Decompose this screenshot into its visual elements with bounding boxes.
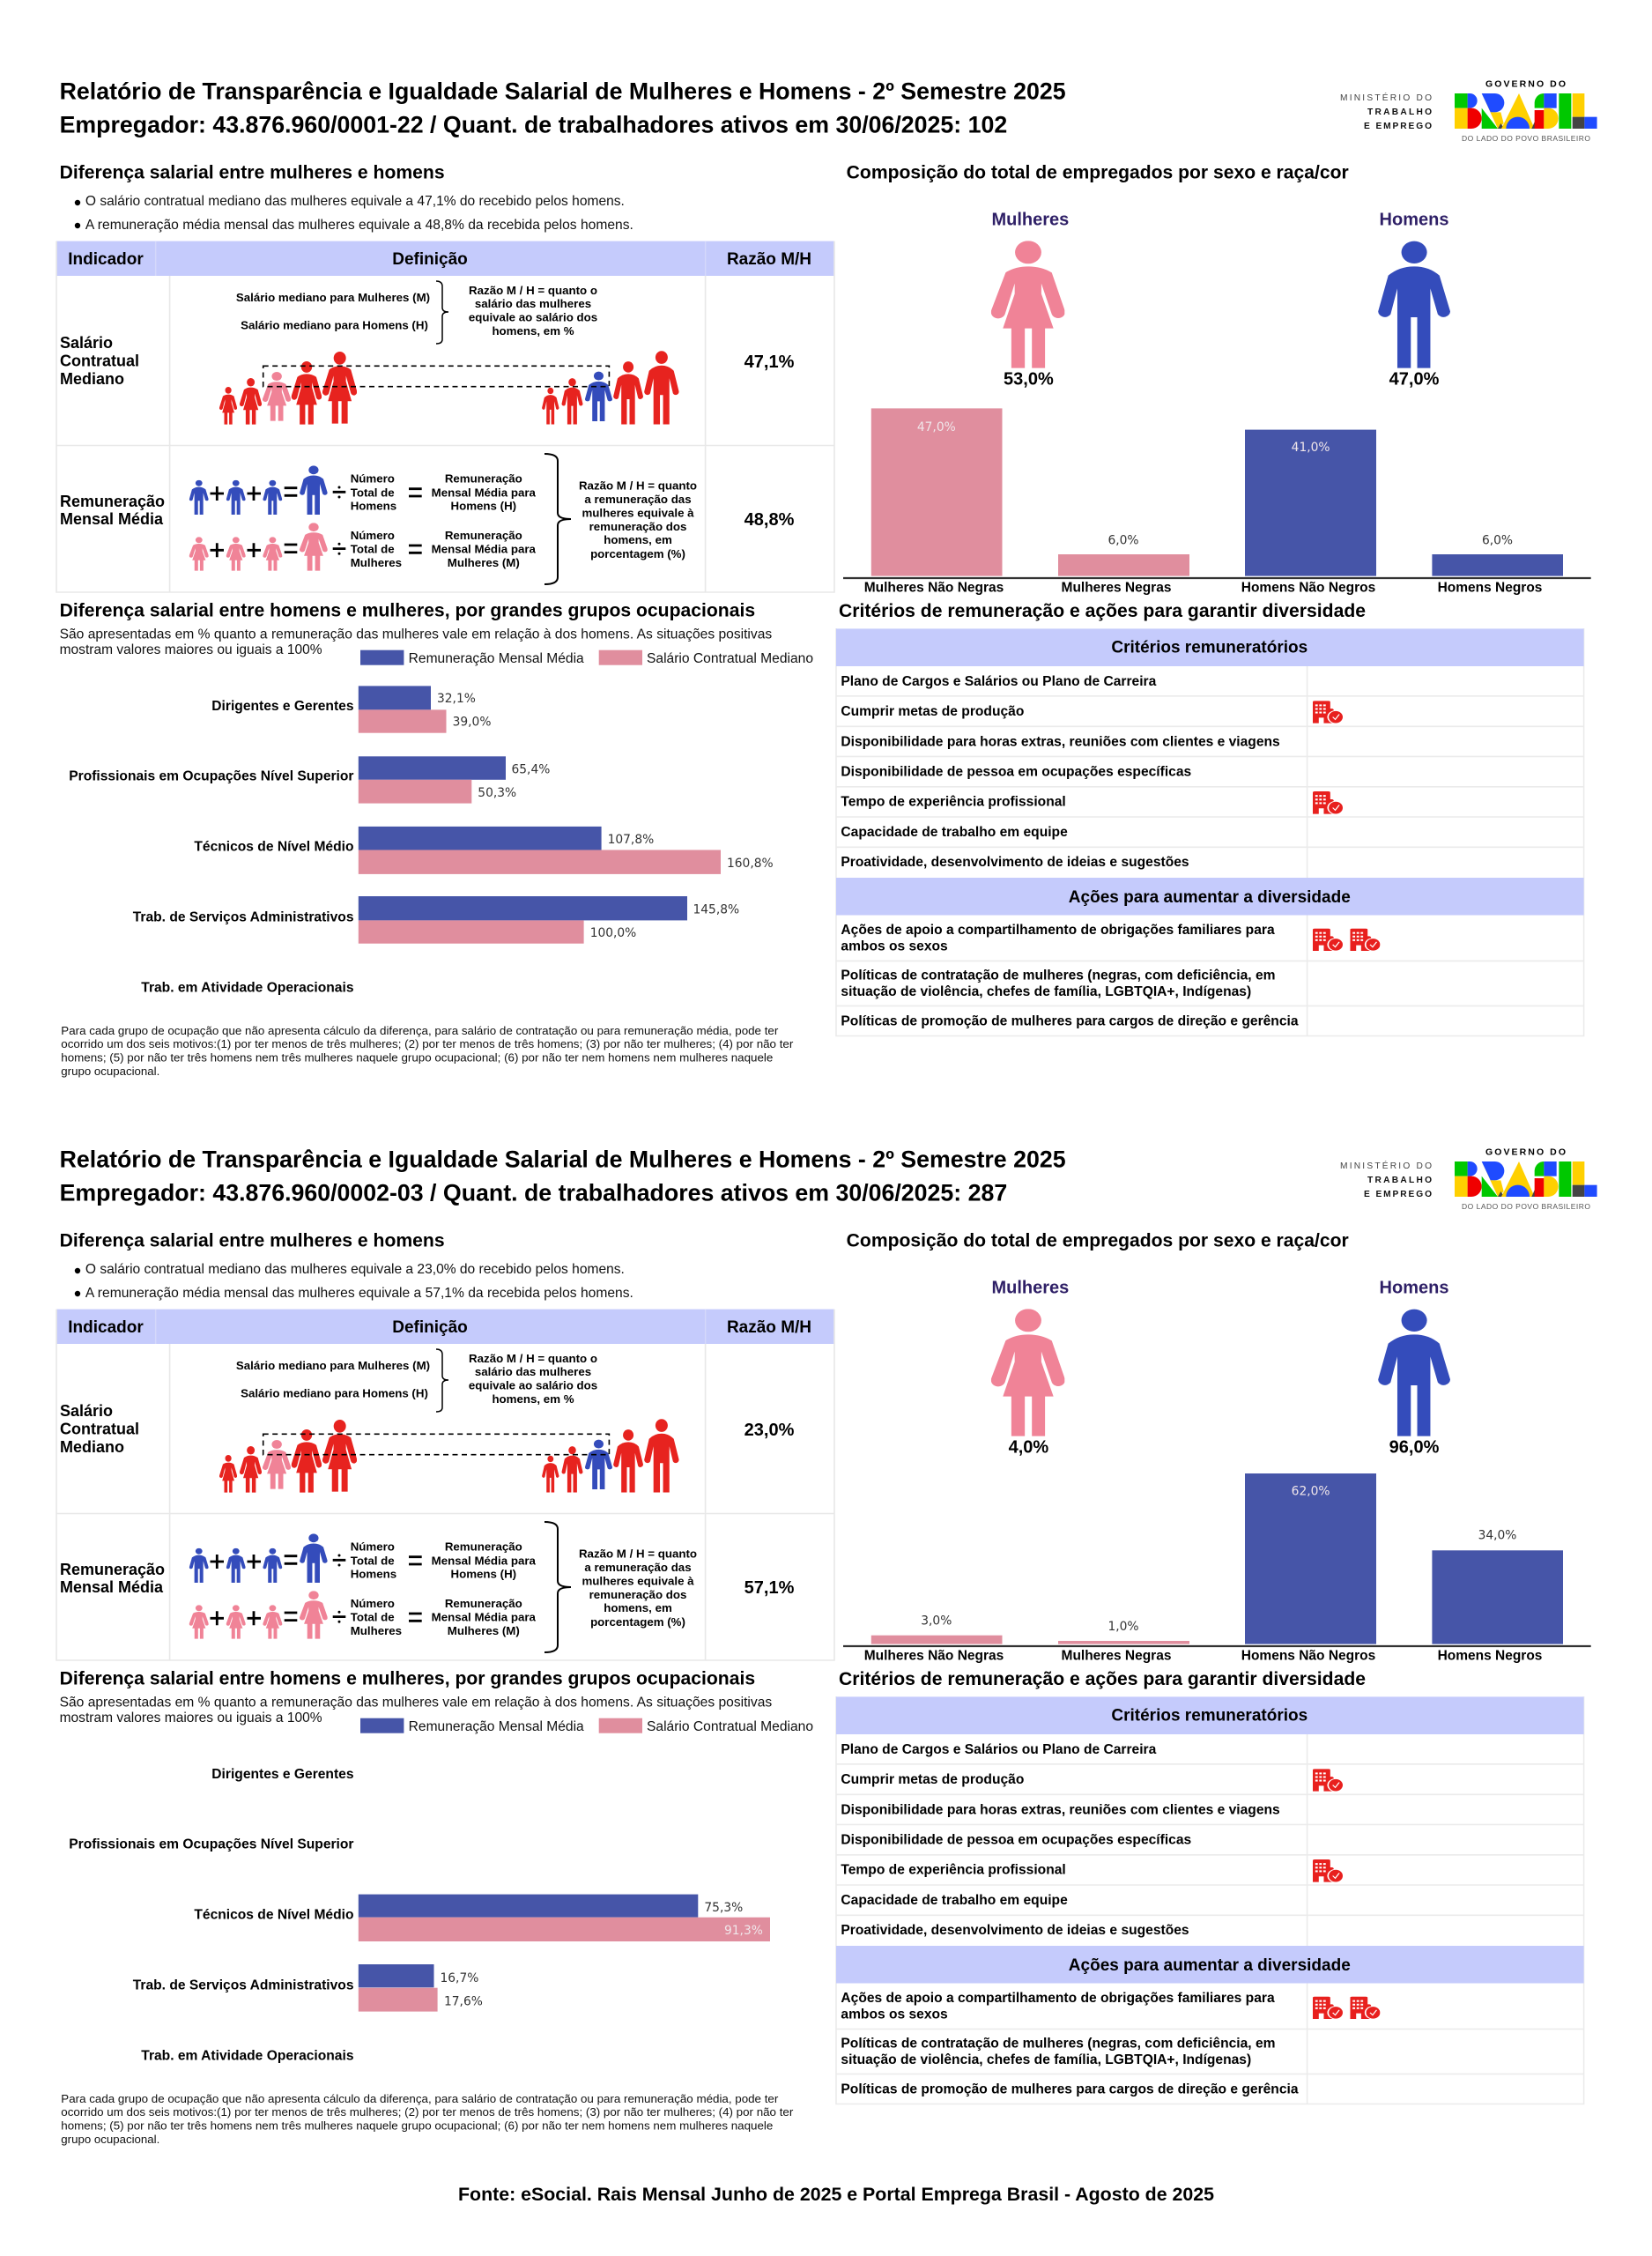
title: Relatório de Transparência e Igualdade Salarial de Mulheres e Homens - 2º Semestre 2025 <box>60 78 1066 104</box>
bar chart: grupos ocupacionais <box>69 686 774 995</box>
description text: São apresentadas em % quanto a remuneração das mulheres vale em relação à dos homens. As situações positivas <box>60 627 772 642</box>
bullet text block: A remuneração média mensal das mulheres equivale a 57,1% da recebida pelos homens. <box>85 1286 633 1301</box>
bar chart: grupos ocupacionais: 50,3% <box>478 786 516 800</box>
legend: Salário Contratual Mediano <box>647 1719 813 1734</box>
row: remuneração mensal média: Mensal Média <box>60 1578 164 1596</box>
bullet text block: A remuneração média mensal das mulheres equivale a 48,8% da recebida pelos homens. <box>85 218 633 233</box>
bar chart: composição por raça/cor <box>843 1473 1591 1664</box>
bar chart: grupos ocupacionais: 16,7% <box>441 1971 478 1985</box>
row: remuneração mensal média: Número <box>351 472 395 486</box>
row: remuneração mensal média: Mensal Média para <box>432 486 537 499</box>
report 1: employer 0001-22 <box>56 78 1597 1078</box>
header: ações: Ações para aumentar a diversidade <box>1069 1956 1351 1975</box>
row: remuneração mensal média: remuneração dos <box>589 520 686 533</box>
panel: homens figure: 47,0% <box>1389 370 1440 390</box>
row: salário contratual mediano: homens, em % <box>492 1392 574 1406</box>
bar chart: composição por raça/cor: Homens Não Negros <box>1241 580 1375 596</box>
row: remuneração mensal média: Mensal Média <box>60 510 164 528</box>
panel: mulheres figure: Mulheres <box>991 1279 1069 1298</box>
bar chart: grupos ocupacionais: Dirigentes e Gerentes <box>211 1767 354 1782</box>
logo: ministério e governo do Brasil: DO LADO DO POVO BRASILEIRO <box>1462 1202 1590 1211</box>
row: salário contratual mediano: Contratual <box>60 352 139 370</box>
header: critérios remuneratórios <box>836 1696 1584 1734</box>
row: salário contratual mediano: Salário mediano para Mulheres (M) <box>236 1359 430 1372</box>
footnote: homens; (5) por não ter três homens nem três mulheres naquele grupo ocupacional; (6) por não ter nem homens nem mulheres naquele <box>61 2119 773 2133</box>
criteria rows: Cumprir metas de produção <box>841 1772 1024 1787</box>
logo: ministério e governo do Brasil: TRABALHO <box>1367 1176 1432 1185</box>
bar chart: composição por raça/cor: 6,0% <box>1482 534 1513 548</box>
action rows: Políticas de promoção de mulheres para cargos de direção e gerência <box>841 1013 1299 1029</box>
logo: ministério e governo do Brasil: E EMPREGO <box>1364 122 1432 131</box>
bar chart: composição por raça/cor <box>843 408 1591 596</box>
bar chart: composição por raça/cor: Mulheres Negras <box>1062 1648 1171 1664</box>
footnote: homens; (5) por não ter três homens nem três mulheres naquele grupo ocupacional; (6) por não ter nem homens nem mulheres naquele <box>61 1051 773 1065</box>
row: salário contratual mediano <box>60 1349 795 1493</box>
source line: Fonte: eSocial. Rais Mensal Junho de 2025 e Portal Emprega Brasil - Agosto de 2025 <box>458 2184 1214 2205</box>
action rows: situação de violência, chefes de família, LGBTQIA+, Indígenas) <box>841 2052 1251 2067</box>
row: remuneração mensal média: Remuneração <box>60 493 165 510</box>
panel: homens figure: 96,0% <box>1389 1438 1440 1458</box>
description text: mostram valores maiores ou iguais a 100% <box>60 642 322 657</box>
row: remuneração mensal média: Remuneração <box>445 472 522 486</box>
legend: Salário Contratual Mediano <box>647 651 813 666</box>
table header <box>56 1310 834 1344</box>
criteria rows: Capacidade de trabalho em equipe <box>841 1893 1068 1908</box>
row: remuneração mensal média: Número <box>351 1597 395 1610</box>
footnote: Para cada grupo de ocupação que não apresenta cálculo da diferença, para salário de contratação ou para remuneração média, pode ter <box>61 1024 779 1037</box>
heading: critérios: Critérios de remuneração e ações para garantir diversidade <box>839 1669 1366 1689</box>
panel: mulheres figure: 53,0% <box>1004 370 1054 390</box>
heading: diferença salarial: Diferença salarial entre mulheres e homens <box>60 1230 445 1251</box>
bullet text block: O salário contratual mediano das mulheres equivale a 23,0% do recebido pelos homens. <box>85 1262 625 1277</box>
row: remuneração mensal média: Mensal Média para <box>432 1554 537 1567</box>
row: remuneração mensal média: mulheres equivale à <box>582 506 694 519</box>
panel: mulheres figure: 4,0% <box>1009 1438 1048 1458</box>
bar chart: composição por raça/cor: Homens Não Negros <box>1241 1648 1375 1664</box>
title <box>60 1146 1066 1206</box>
row: remuneração mensal média: Homens <box>351 500 396 513</box>
panel: homens figure <box>1378 1279 1450 1458</box>
criteria rows: Disponibilidade de pessoa em ocupações específicas <box>841 764 1192 779</box>
row: remuneração mensal média <box>60 454 795 584</box>
row: remuneração mensal média: Mensal Média para <box>432 1610 537 1623</box>
row: salário contratual mediano: 47,1% <box>745 352 795 372</box>
criteria rows <box>841 1742 1344 1938</box>
bar chart: composição por raça/cor: 41,0% <box>1292 441 1330 455</box>
row: salário contratual mediano: salário das mulheres <box>475 297 591 310</box>
panel: mulheres figure <box>991 1279 1069 1458</box>
row: salário contratual mediano: Salário <box>60 1402 113 1420</box>
panel: critérios table <box>836 1696 1584 2104</box>
footnote <box>61 1024 794 1078</box>
logo: ministério e governo do Brasil <box>1340 1147 1597 1211</box>
row: remuneração mensal média: porcentagem (%) <box>590 1615 685 1629</box>
bar chart: composição por raça/cor: Mulheres Negras <box>1062 580 1171 596</box>
panel: homens figure: Homens <box>1380 211 1448 230</box>
bar chart: grupos ocupacionais: 65,4% <box>511 763 550 777</box>
action rows: situação de violência, chefes de família, LGBTQIA+, Indígenas) <box>841 984 1251 999</box>
logo: ministério e governo do Brasil: E EMPREGO <box>1364 1190 1432 1199</box>
action rows: Políticas de contratação de mulheres (negras, com deficiência, em <box>841 968 1276 983</box>
title: Relatório de Transparência e Igualdade Salarial de Mulheres e Homens - 2º Semestre 2025 <box>60 1146 1066 1172</box>
heading: grupos ocupacionais: Diferença salarial entre homens e mulheres, por grandes grupos ocupacionais <box>60 601 755 621</box>
bar chart: grupos ocupacionais: Técnicos de Nível Médio <box>194 1908 354 1923</box>
row: salário contratual mediano: equivale ao salário dos <box>469 1379 597 1392</box>
row: remuneração mensal média: Homens (H) <box>450 1568 516 1581</box>
row: salário contratual mediano: Salário mediano para Homens (H) <box>241 1386 428 1399</box>
criteria rows: Cumprir metas de produção <box>841 704 1024 719</box>
header: critérios remuneratórios <box>836 628 1584 666</box>
row: remuneração mensal média: 48,8% <box>745 510 795 530</box>
logo: ministério e governo do Brasil: GOVERNO DO <box>1485 1147 1566 1157</box>
header: ações <box>836 1946 1584 1983</box>
criteria rows: Plano de Cargos e Salários ou Plano de Carreira <box>841 1742 1157 1757</box>
bar chart: grupos ocupacionais: 107,8% <box>608 833 654 847</box>
bar chart: grupos ocupacionais: 75,3% <box>704 1901 743 1915</box>
row: remuneração mensal média: Número <box>351 529 395 542</box>
bar chart: grupos ocupacionais: 100,0% <box>590 926 636 940</box>
row: remuneração mensal média: Mulheres <box>351 1624 402 1637</box>
report 2: employer 0002-03 <box>56 1146 1597 2146</box>
row: remuneração mensal média: remuneração dos <box>589 1588 686 1601</box>
panel: homens figure <box>1378 211 1450 390</box>
panel: critérios table <box>836 628 1584 1036</box>
action rows: Políticas de promoção de mulheres para cargos de direção e gerência <box>841 2082 1299 2097</box>
table header: Razão M/H <box>727 1318 811 1337</box>
bar chart: composição por raça/cor: Homens Negros <box>1438 580 1542 596</box>
action rows: Políticas de contratação de mulheres (negras, com deficiência, em <box>841 2036 1276 2052</box>
legend <box>360 1718 813 1734</box>
bar chart: grupos ocupacionais: Trab. em Atividade Operacionais <box>141 980 354 995</box>
row: salário contratual mediano: Salário mediano para Homens (H) <box>241 318 428 331</box>
panel: indicator table <box>56 241 834 592</box>
row: salário contratual mediano: salário das mulheres <box>475 1365 591 1378</box>
header: ações: Ações para aumentar a diversidade <box>1069 888 1351 907</box>
heading: critérios: Critérios de remuneração e ações para garantir diversidade <box>839 601 1366 621</box>
bar chart: grupos ocupacionais: Técnicos de Nível Médio <box>194 840 354 855</box>
bar chart: composição por raça/cor: Homens Negros <box>1438 1648 1542 1664</box>
bar chart: grupos ocupacionais: 17,6% <box>444 1995 483 2009</box>
footnote <box>61 2092 794 2146</box>
title: Empregador: 43.876.960/0001-22 / Quant. de trabalhadores ativos em 30/06/2025: 102 <box>60 111 1007 137</box>
bar chart: composição por raça/cor: Mulheres Não Negras <box>864 580 1004 596</box>
row: salário contratual mediano: homens, em % <box>492 324 574 338</box>
description text <box>60 627 772 657</box>
row: salário contratual mediano: Razão M / H = quanto o <box>469 284 597 297</box>
legend: Remuneração Mensal Média <box>409 1719 584 1734</box>
bar chart: grupos ocupacionais: 39,0% <box>453 716 491 730</box>
criteria rows: Capacidade de trabalho em equipe <box>841 825 1068 840</box>
criteria rows: Disponibilidade para horas extras, reuniões com clientes e viagens <box>841 1802 1280 1817</box>
table header: Definição <box>392 250 468 269</box>
row: remuneração mensal média: Mensal Média para <box>432 542 537 555</box>
row: remuneração mensal média: a remuneração das <box>584 1561 692 1574</box>
criteria rows: Tempo de experiência profissional <box>841 795 1066 809</box>
bar chart: grupos ocupacionais: Trab. de Serviços Administrativos <box>133 909 354 925</box>
logo: ministério e governo do Brasil: MINISTÉRIO DO <box>1340 92 1432 103</box>
criteria rows: Tempo de experiência profissional <box>841 1863 1066 1877</box>
row: remuneração mensal média: Total de <box>351 486 395 499</box>
bullet text block: O salário contratual mediano das mulheres equivale a 47,1% do recebido pelos homens. <box>85 194 625 209</box>
table header: Indicador <box>68 1318 144 1337</box>
row: remuneração mensal média: Homens (H) <box>450 500 516 513</box>
bar chart: composição por raça/cor: 1,0% <box>1108 1620 1139 1634</box>
row: remuneração mensal média: a remuneração das <box>584 493 692 506</box>
logo: ministério e governo do Brasil: MINISTÉRIO DO <box>1340 1160 1432 1171</box>
criteria rows <box>841 674 1344 870</box>
bar chart: grupos ocupacionais: Profissionais em Ocupações Nível Superior <box>69 1837 354 1852</box>
legend: Remuneração Mensal Média <box>409 651 584 666</box>
bar chart: grupos ocupacionais: Trab. de Serviços Administrativos <box>133 1978 354 1993</box>
bar chart: composição por raça/cor: Mulheres Não Negras <box>864 1648 1004 1664</box>
row: salário contratual mediano: Salário <box>60 334 113 352</box>
description text: mostram valores maiores ou iguais a 100% <box>60 1711 322 1725</box>
bar chart: grupos ocupacionais: Dirigentes e Gerentes <box>211 699 354 714</box>
bar chart: grupos ocupacionais: Profissionais em Ocupações Nível Superior <box>69 769 354 784</box>
bar chart: composição por raça/cor: 6,0% <box>1108 534 1139 548</box>
row: remuneração mensal média: Total de <box>351 542 395 555</box>
row: remuneração mensal média: Remuneração <box>60 1561 165 1578</box>
logo: ministério e governo do Brasil: DO LADO DO POVO BRASILEIRO <box>1462 134 1590 143</box>
row: remuneração mensal média: Remuneração <box>445 1540 522 1554</box>
logo: ministério e governo do Brasil: TRABALHO <box>1367 108 1432 117</box>
bar chart: grupos ocupacionais: 145,8% <box>693 902 739 916</box>
row: remuneração mensal média: porcentagem (%) <box>590 547 685 560</box>
table header: Razão M/H <box>727 250 811 269</box>
footnote: grupo ocupacional. <box>61 2133 159 2146</box>
row: salário contratual mediano: Mediano <box>60 370 124 388</box>
action rows <box>841 1991 1381 2097</box>
row: salário contratual mediano: Contratual <box>60 1421 139 1438</box>
row: remuneração mensal média: Número <box>351 1540 395 1554</box>
bar chart: composição por raça/cor: 62,0% <box>1292 1485 1330 1499</box>
table header: Indicador <box>68 250 144 269</box>
row: remuneração mensal média: 57,1% <box>745 1578 795 1598</box>
bar chart: grupos ocupacionais: 32,1% <box>437 692 476 706</box>
row: salário contratual mediano: Salário mediano para Mulheres (M) <box>236 291 430 304</box>
table header: Definição <box>392 1318 468 1337</box>
bullet text block <box>75 1262 633 1301</box>
action rows: Ações de apoio a compartilhamento de obrigações familiares para <box>841 1991 1275 2006</box>
row: remuneração mensal média: Mulheres <box>351 556 402 569</box>
bar chart: grupos ocupacionais: Trab. em Atividade Operacionais <box>141 2048 354 2063</box>
row: remuneração mensal média: Total de <box>351 1554 395 1567</box>
row: salário contratual mediano: Mediano <box>60 1438 124 1456</box>
row: remuneração mensal média <box>60 1522 795 1652</box>
row: remuneração mensal média: Remuneração <box>445 1597 522 1610</box>
criteria rows: Disponibilidade para horas extras, reuniões com clientes e viagens <box>841 734 1280 749</box>
row: remuneração mensal média: homens, em <box>604 1601 672 1614</box>
row: remuneração mensal média: homens, em <box>604 533 672 546</box>
header: ações <box>836 878 1584 915</box>
heading: composição: Composição do total de empregados por sexo e raça/cor <box>847 162 1349 183</box>
logo: ministério e governo do Brasil: GOVERNO DO <box>1485 78 1566 89</box>
table header <box>56 241 834 276</box>
row: remuneração mensal média: Mulheres (M) <box>448 556 520 569</box>
bar chart: grupos ocupacionais <box>69 1767 770 2063</box>
title <box>60 78 1066 137</box>
action rows: ambos os sexos <box>841 2007 948 2022</box>
heading: grupos ocupacionais: Diferença salarial entre homens e mulheres, por grandes grupos ocupacionais <box>60 1669 755 1689</box>
row: remuneração mensal média: Homens <box>351 1568 396 1581</box>
criteria rows: Disponibilidade de pessoa em ocupações específicas <box>841 1832 1192 1847</box>
panel: indicator table <box>56 1310 834 1660</box>
heading: composição: Composição do total de empregados por sexo e raça/cor <box>847 1230 1349 1251</box>
row: salário contratual mediano: equivale ao salário dos <box>469 311 597 324</box>
row: salário contratual mediano: 23,0% <box>745 1421 795 1440</box>
heading: diferença salarial: Diferença salarial entre mulheres e homens <box>60 162 445 183</box>
bar chart: grupos ocupacionais: 91,3% <box>724 1924 763 1938</box>
legend <box>360 650 813 666</box>
panel: mulheres figure <box>991 211 1069 390</box>
criteria rows: Plano de Cargos e Salários ou Plano de Carreira <box>841 674 1157 689</box>
row: salário contratual mediano: Razão M / H = quanto o <box>469 1352 597 1365</box>
row: remuneração mensal média: mulheres equivale à <box>582 1574 694 1587</box>
action rows: Ações de apoio a compartilhamento de obrigações familiares para <box>841 923 1275 938</box>
footnote: ocorrido um dos seis motivos:(1) por ter menos de três mulheres; (2) por ter menos de três homens; (3) por não ter mulheres; (4) por não ter <box>61 1037 794 1050</box>
action rows: ambos os sexos <box>841 939 948 954</box>
header: critérios remuneratórios: Critérios remuneratórios <box>1111 1707 1308 1725</box>
bar chart: composição por raça/cor: 3,0% <box>921 1614 952 1628</box>
footnote: ocorrido um dos seis motivos:(1) por ter menos de três mulheres; (2) por ter menos de três homens; (3) por não ter mulheres; (4) por não ter <box>61 2105 794 2119</box>
criteria rows: Proatividade, desenvolvimento de ideias e sugestões <box>841 855 1189 870</box>
panel: homens figure: Homens <box>1380 1279 1448 1298</box>
criteria rows: Proatividade, desenvolvimento de ideias e sugestões <box>841 1923 1189 1938</box>
bar chart: grupos ocupacionais: 160,8% <box>727 857 774 871</box>
logo: ministério e governo do Brasil <box>1340 78 1597 143</box>
bullet text block <box>75 194 633 233</box>
header: critérios remuneratórios: Critérios remuneratórios <box>1111 639 1308 657</box>
footnote: Para cada grupo de ocupação que não apresenta cálculo da diferença, para salário de contratação ou para remuneração média, pode ter <box>61 2092 779 2105</box>
row: remuneração mensal média: Razão M / H = quanto <box>579 479 697 493</box>
footnote: grupo ocupacional. <box>61 1065 159 1078</box>
row: remuneração mensal média: Remuneração <box>445 529 522 542</box>
row: remuneração mensal média: Total de <box>351 1610 395 1623</box>
row: remuneração mensal média: Razão M / H = quanto <box>579 1547 697 1561</box>
panel: mulheres figure: Mulheres <box>991 211 1069 230</box>
row: salário contratual mediano <box>60 281 795 425</box>
row: remuneração mensal média: Mulheres (M) <box>448 1624 520 1637</box>
action rows <box>841 923 1381 1029</box>
bar chart: composição por raça/cor: 47,0% <box>917 420 956 434</box>
description text <box>60 1695 772 1725</box>
bar chart: composição por raça/cor: 34,0% <box>1478 1529 1516 1543</box>
description text: São apresentadas em % quanto a remuneração das mulheres vale em relação à dos homens. As situações positivas <box>60 1695 772 1710</box>
title: Empregador: 43.876.960/0002-03 / Quant. de trabalhadores ativos em 30/06/2025: 287 <box>60 1179 1007 1206</box>
